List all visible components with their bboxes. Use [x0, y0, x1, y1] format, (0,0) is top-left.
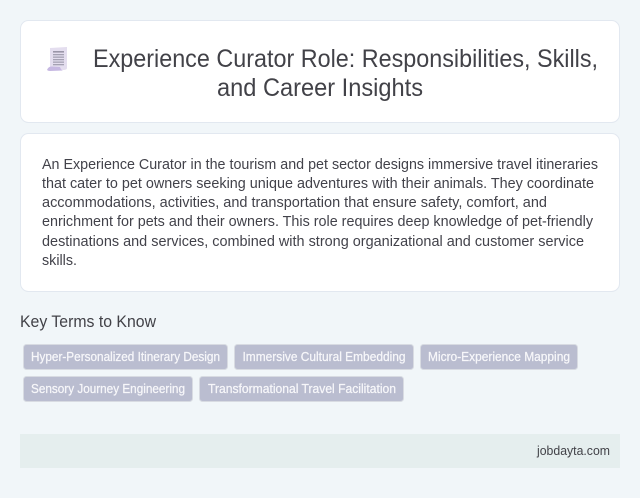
tag: immersive cultural embedding: Immersive Cultural Embedding [242, 350, 406, 364]
text block: description: skills. [42, 252, 77, 269]
text block: description: that cater to pet owners seeking unique adventures with their animals. They coordinate [42, 175, 594, 192]
text block: description: destinations and services, combined with strong organizational and customer service [42, 233, 584, 250]
tag: transformational travel facilitation [200, 376, 404, 402]
title: Experience Curator Role: Responsibilities, Skills, [93, 45, 598, 73]
text block: description: An Experience Curator in the tourism and pet sector designs immersive travel itineraries [42, 156, 598, 173]
tag: hyper-personalized itinerary design: Hyper-Personalized Itinerary Design [31, 350, 220, 364]
text block: description [42, 156, 598, 269]
title: and Career Insights [217, 74, 423, 102]
tag: micro-experience mapping [420, 344, 578, 370]
tag: hyper-personalized itinerary design [24, 344, 228, 370]
tag: immersive cultural embedding [234, 344, 414, 370]
panel: description card [20, 134, 620, 292]
panel: title card [20, 20, 620, 122]
icon: document scroll [47, 47, 67, 71]
tag: sensory journey engineering: Sensory Journey Engineering [31, 382, 185, 396]
footer bar: jobdayta.com [536, 444, 610, 458]
tag: sensory journey engineering [24, 376, 192, 402]
tag: micro-experience mapping: Micro-Experience Mapping [428, 350, 570, 364]
text block: description: enrichment for pets and their owners. This role requires deep knowledge of pet-friendly [42, 213, 593, 230]
text block: description: accommodations, activities, and transportation that ensure safety, comfort, and [42, 194, 547, 211]
title [93, 45, 598, 102]
heading: key terms: Key Terms to Know [20, 313, 156, 331]
footer bar [20, 434, 620, 468]
tag: transformational travel facilitation: Transformational Travel Facilitation [208, 382, 396, 396]
